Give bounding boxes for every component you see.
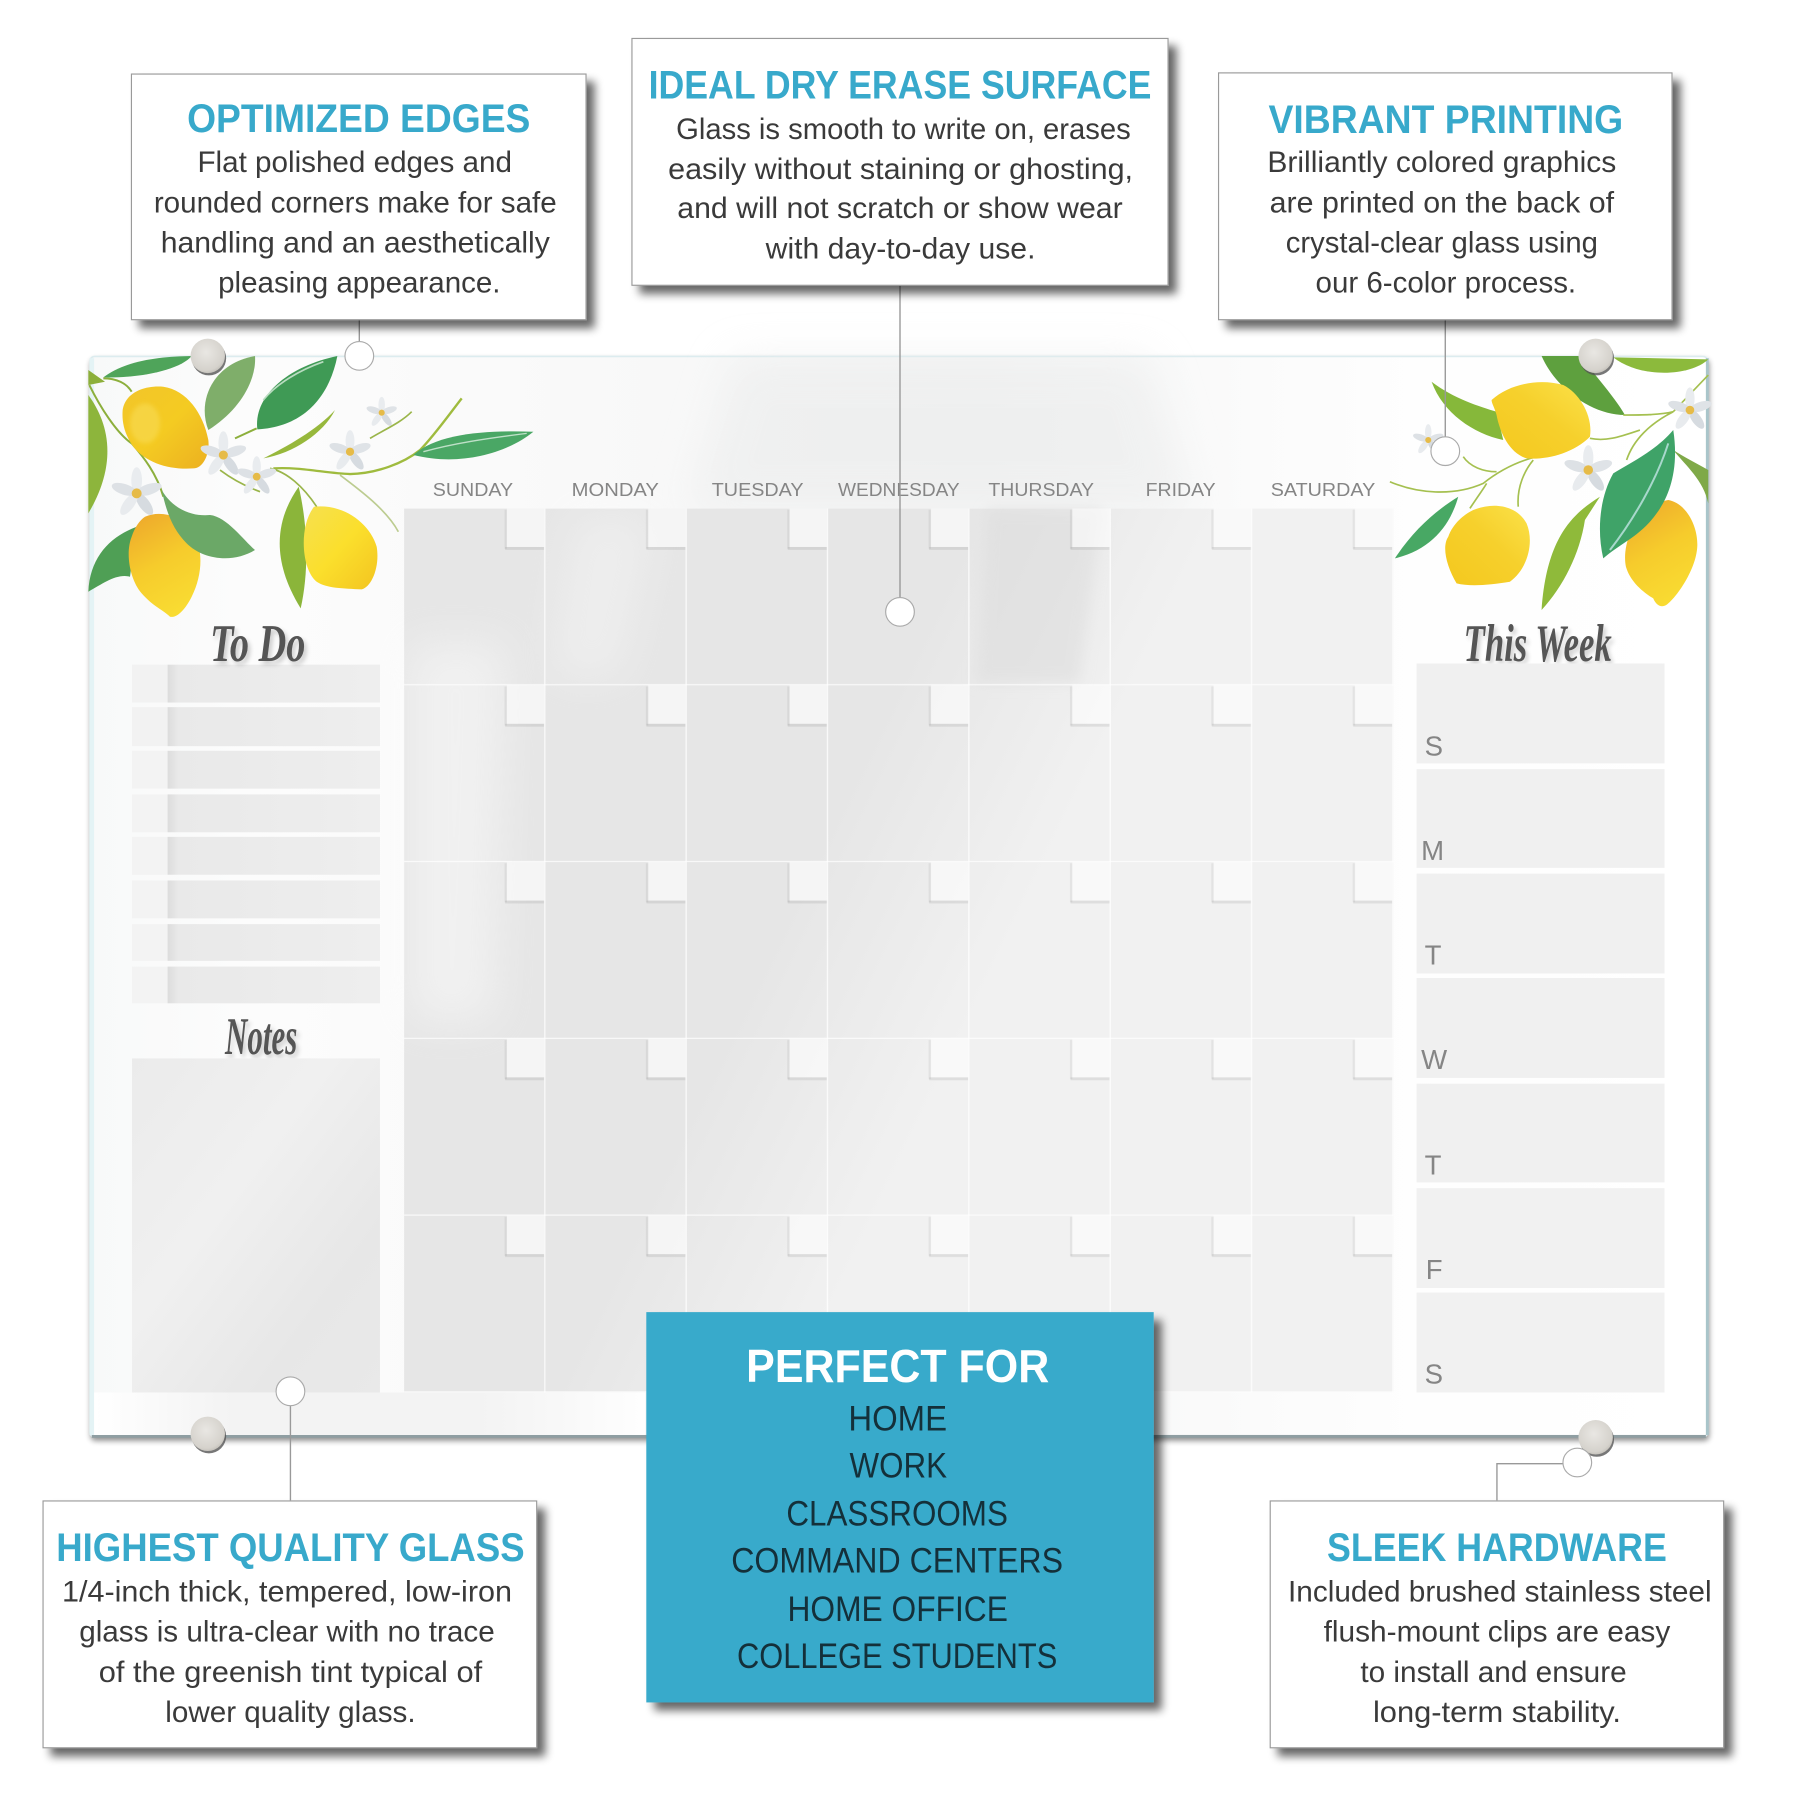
callout: highest quality glass (43, 1501, 537, 1748)
callout: ideal dry erase surface (632, 38, 1168, 285)
callout body: Brilliantly colored graphics (1267, 146, 1616, 179)
connector: sleek hardware (1497, 1448, 1592, 1500)
heading: To Do: To Do (210, 615, 305, 673)
connector: optimized edges (345, 320, 374, 370)
callout body: are printed on the back of (1270, 186, 1615, 219)
callout body: 1/4-inch thick, tempered, low-iron (62, 1575, 512, 1608)
perfect for heading: PERFECT FOR (746, 1340, 1049, 1392)
connector: dry erase surface (886, 286, 914, 626)
callout body: pleasing appearance. (218, 267, 501, 300)
callout body (62, 1575, 512, 1729)
perfect for list: WORK (849, 1445, 947, 1485)
callout body (1267, 146, 1616, 300)
panel: notes (132, 1058, 380, 1392)
callout heading: VIBRANT PRINTING (1268, 97, 1623, 142)
connector: highest quality glass (276, 1377, 305, 1500)
callout body: of the greenish tint typical of (99, 1656, 483, 1689)
panel: this week: T (1425, 1149, 1442, 1180)
callout body: with day-to-day use. (765, 232, 1035, 265)
illustration: top-right lemons and leaves (1390, 356, 1713, 610)
perfect for list (731, 1398, 1063, 1676)
callout body: lower quality glass. (165, 1696, 416, 1729)
weekday labels: TUESDAY (712, 479, 804, 500)
callout body (154, 146, 557, 300)
weekday labels: WEDNESDAY (838, 479, 960, 500)
panel: this week: F (1426, 1254, 1443, 1285)
callout body: rounded corners make for safe (154, 186, 557, 219)
callout body: Flat polished edges and (197, 146, 512, 179)
panel: this week: T (1425, 939, 1442, 970)
callout body: crystal-clear glass using (1286, 227, 1598, 260)
weekday labels: FRIDAY (1146, 479, 1216, 500)
callout heading: HIGHEST QUALITY GLASS (56, 1525, 525, 1570)
perfect for list: COLLEGE STUDENTS (737, 1636, 1057, 1676)
callout: sleek hardware (1270, 1501, 1724, 1748)
icon: clip bottom-right (1578, 1420, 1614, 1457)
weekday labels: THURSDAY (988, 479, 1094, 500)
panel: to do list (132, 665, 380, 1003)
panel: this week: S (1425, 1358, 1443, 1389)
heading: This Week: This Week (1464, 615, 1612, 673)
callout body: handling and an aesthetically (161, 227, 550, 260)
perfect for list: HOME (848, 1398, 947, 1438)
heading: Notes: Notes (224, 1008, 297, 1066)
illustration: top-left lemons and leaves (88, 356, 533, 617)
callout body: to install and ensure (1360, 1656, 1627, 1689)
icon: clip bottom-left (191, 1417, 226, 1453)
callout body: flush-mount clips are easy (1324, 1616, 1670, 1649)
callout body: our 6-color process. (1316, 267, 1576, 300)
icon: clip top-right (1578, 339, 1614, 375)
weekday labels: MONDAY (572, 479, 659, 500)
callout: vibrant printing (1219, 73, 1672, 320)
date boxes and cell lines (404, 509, 1394, 1392)
callout body (668, 113, 1133, 265)
callout body: long-term stability. (1373, 1696, 1621, 1729)
perfect for list: CLASSROOMS (786, 1494, 1008, 1534)
callout body (1288, 1575, 1712, 1729)
perfect for list: COMMAND CENTERS (731, 1541, 1063, 1581)
callout body: and will not scratch or show wear (677, 192, 1123, 225)
connector: vibrant printing (1431, 320, 1460, 465)
panel: this week: W (1421, 1044, 1447, 1075)
perfect for list: HOME OFFICE (788, 1589, 1008, 1629)
callout heading: SLEEK HARDWARE (1327, 1525, 1667, 1570)
panel: this week (1417, 664, 1665, 1392)
callout heading: IDEAL DRY ERASE SURFACE (649, 63, 1151, 108)
callout: optimized edges (131, 74, 586, 320)
callout body: Included brushed stainless steel (1288, 1575, 1712, 1608)
weekday labels: SUNDAY (433, 479, 513, 500)
panel: perfect for (646, 1312, 1154, 1702)
panel: this week: S (1425, 730, 1443, 761)
weekday labels (433, 479, 1375, 500)
callout body: Glass is smooth to write on, erases (676, 113, 1131, 146)
glass board (90, 356, 1709, 1438)
callout body: glass is ultra-clear with no trace (79, 1616, 495, 1649)
callout body: easily without staining or ghosting, (668, 153, 1133, 186)
calendar grid (404, 509, 1394, 1392)
weekday labels: SATURDAY (1271, 479, 1375, 500)
icon: clip top-left (191, 339, 226, 375)
panel: this week: M (1421, 835, 1444, 866)
callout heading: OPTIMIZED EDGES (187, 96, 530, 141)
